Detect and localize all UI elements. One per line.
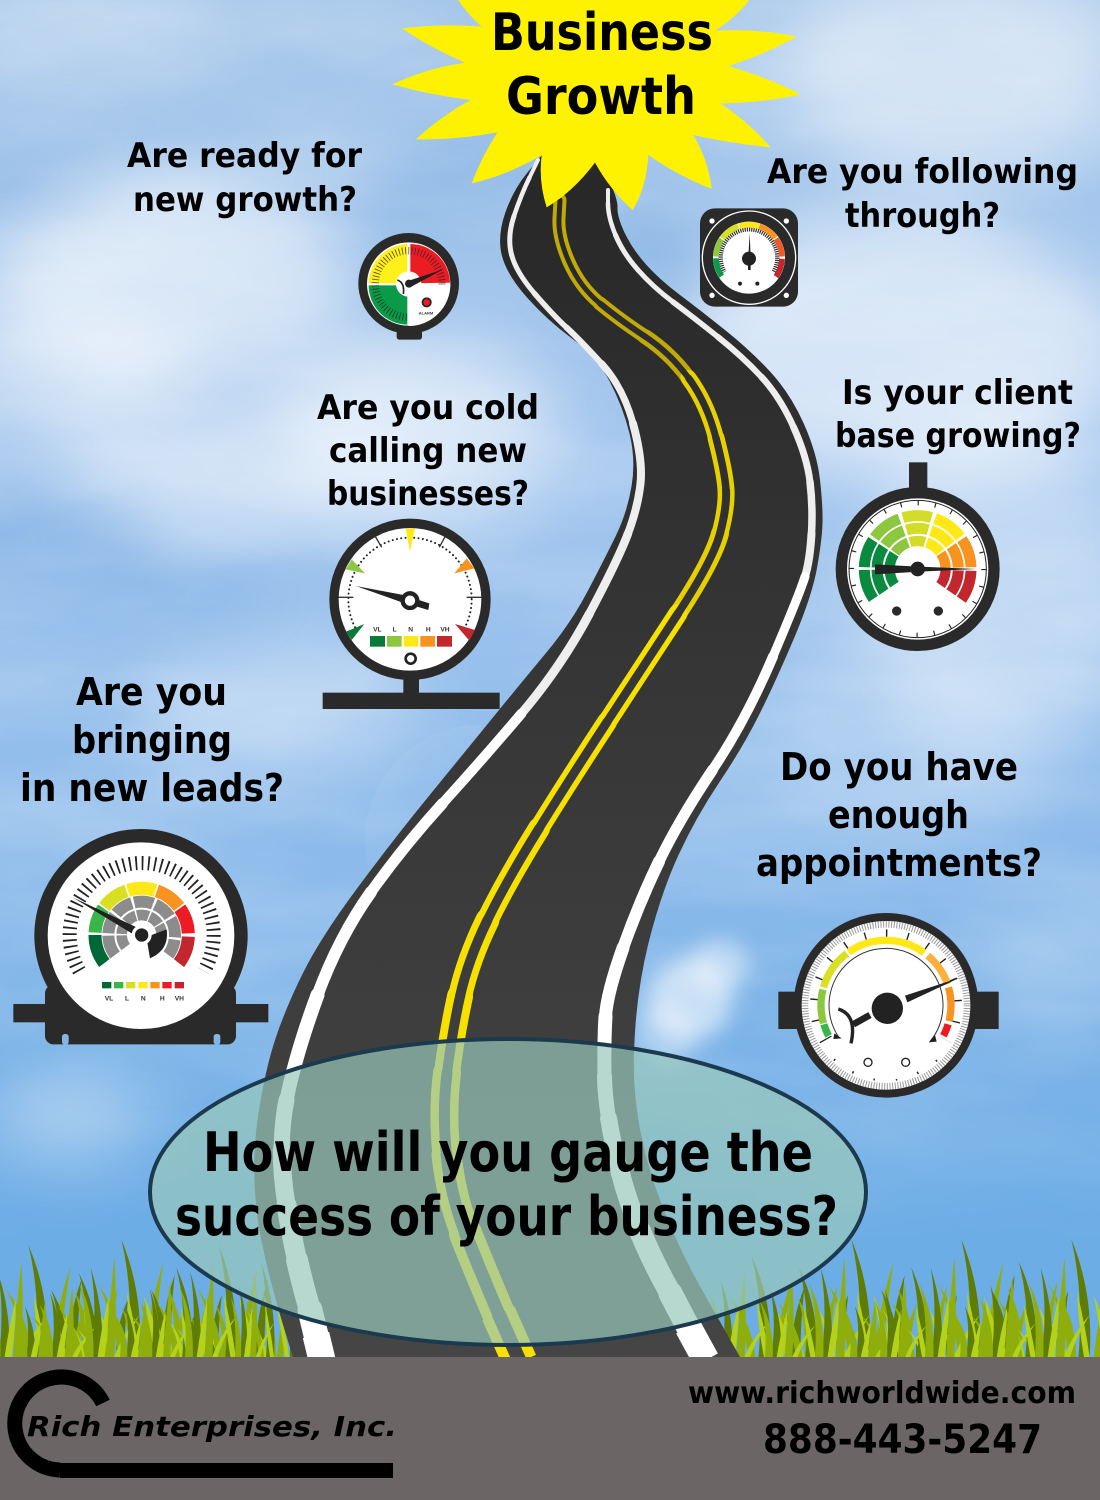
callout text: How will you gauge the <box>203 1121 813 1184</box>
question: new leads: bringing <box>72 718 232 762</box>
callout text <box>175 1121 838 1248</box>
double yellow center line <box>444 200 726 1362</box>
yellow starburst <box>392 0 801 210</box>
question: cold calling: businesses? <box>327 474 529 514</box>
starburst with title <box>392 0 801 210</box>
question: new leads <box>20 670 284 810</box>
gauge: new leads: VH <box>175 995 184 1002</box>
gauge: following through <box>700 208 798 307</box>
question: following through: through? <box>845 196 1000 236</box>
gauge: new growth: ALARM <box>419 310 434 315</box>
question: cold calling <box>317 388 539 514</box>
question: following through <box>767 152 1078 236</box>
gauge: client base <box>841 462 994 645</box>
question: new leads: in new leads? <box>20 766 284 810</box>
gauge: cold calling: VH <box>440 626 450 633</box>
question: new leads: Are you <box>76 670 227 714</box>
gauge: new leads: N <box>141 995 146 1002</box>
footer bar <box>0 1357 1100 1500</box>
gauge: new growth <box>358 233 459 340</box>
callout ellipse <box>150 1039 866 1345</box>
winding road <box>254 155 823 1362</box>
title: Growth <box>506 67 696 127</box>
question: following through: Are you following <box>767 152 1078 192</box>
gauge: new leads <box>13 836 268 1045</box>
road surface <box>254 155 823 1357</box>
callout text: success of your business? <box>175 1185 838 1248</box>
grass <box>0 1239 1100 1357</box>
gauge: appointments <box>778 914 999 1097</box>
website and phone: www.richworldwide.com <box>688 1376 1076 1411</box>
gauge: cold calling <box>323 523 500 709</box>
question: new growth <box>127 136 362 220</box>
company logo: Rich Enterprises, Inc. <box>27 1410 397 1443</box>
question: appointments: Do you have <box>780 745 1018 789</box>
left white edge line <box>282 160 641 1360</box>
question: cold calling: Are you cold <box>317 388 539 428</box>
question: client base <box>835 373 1081 456</box>
gauge: new leads: H <box>160 995 165 1002</box>
question: appointments <box>756 745 1042 885</box>
question: cold calling: calling new <box>329 431 527 471</box>
gauge: cold calling: N <box>408 626 413 633</box>
question: appointments: enough <box>828 793 969 837</box>
gauge: cold calling: H <box>426 626 431 633</box>
question: appointments: appointments? <box>756 841 1042 885</box>
website and phone: 888-443-5247 <box>763 1417 1042 1463</box>
title: Business <box>491 3 713 63</box>
gauge: cold calling: L <box>393 626 397 633</box>
gauge: cold calling: VL <box>373 626 382 633</box>
question: new growth: Are ready for <box>127 136 362 176</box>
right white edge line <box>604 190 812 1360</box>
gauge: new leads: VL <box>105 995 113 1002</box>
question: new growth: new growth? <box>133 180 357 220</box>
company logo <box>15 1377 397 1478</box>
website and phone <box>688 1376 1076 1463</box>
question: client base: Is your client <box>842 373 1073 413</box>
gauge: new leads: L <box>125 995 129 1002</box>
title <box>491 3 713 127</box>
